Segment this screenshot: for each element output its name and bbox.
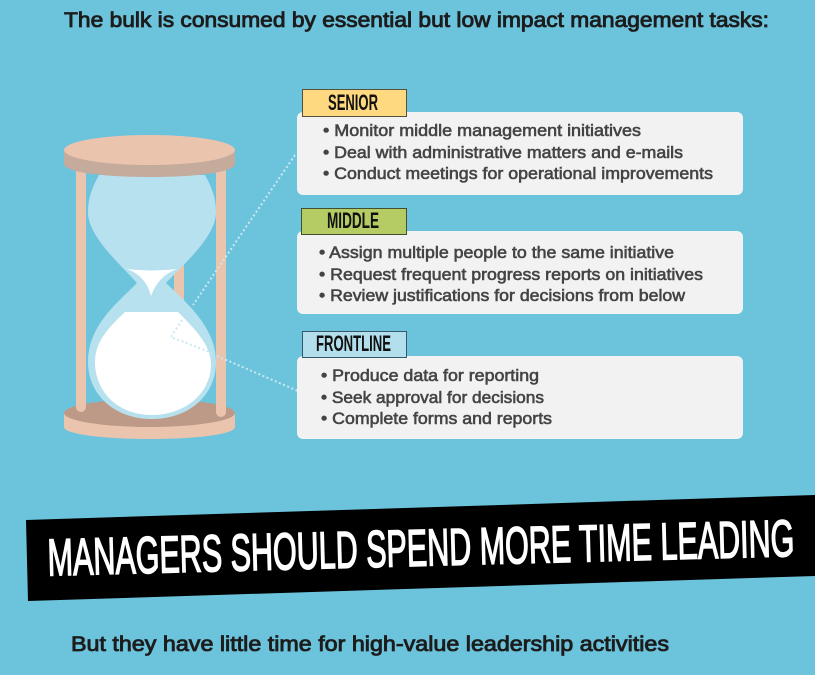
senior bullet list	[323, 121, 713, 183]
icon: hourglass	[64, 135, 235, 439]
frontline label: FRONTLINE	[316, 331, 391, 356]
senior label	[302, 90, 406, 116]
hourglass glass	[88, 175, 216, 419]
middle bullet list	[319, 243, 703, 305]
senior bullet list: • Deal with administrative matters and e-mails	[323, 143, 683, 162]
senior card	[297, 112, 743, 195]
senior bullet list: • Conduct meetings for operational improvements	[323, 164, 713, 183]
panel: frontline	[297, 331, 743, 439]
frontline bullet list: • Produce data for reporting	[321, 366, 539, 385]
sand top	[127, 269, 177, 296]
frontline bullet list	[321, 366, 552, 428]
frontline bullet list: • Complete forms and reports	[321, 409, 552, 428]
panel: senior	[297, 90, 743, 195]
panel: middle	[297, 208, 743, 314]
middle card	[297, 231, 743, 314]
senior label: SENIOR	[328, 90, 378, 115]
frontline label	[302, 331, 406, 358]
middle label	[302, 208, 406, 234]
sand bottom	[95, 312, 211, 415]
heading: bulk of time: The bulk is consumed by essential but low impact management tasks:	[64, 9, 769, 32]
footer text: But they have little time for high-value leadership activities	[71, 633, 669, 656]
hourglass top cap	[64, 135, 235, 177]
senior bullet list: • Monitor middle management initiatives	[323, 121, 641, 140]
dotted connector lines	[171, 155, 298, 391]
middle label: MIDDLE	[327, 208, 379, 233]
frontline bullet list: • Seek approval for decisions	[321, 388, 544, 407]
frontline card	[297, 356, 743, 439]
middle bullet list: • Request frequent progress reports on initiatives	[319, 265, 703, 284]
hourglass posts	[76, 165, 226, 417]
hourglass base	[64, 399, 235, 439]
middle bullet list: • Review justifications for decisions from below	[319, 286, 686, 305]
middle bullet list: • Assign multiple people to the same initiative	[319, 243, 674, 262]
